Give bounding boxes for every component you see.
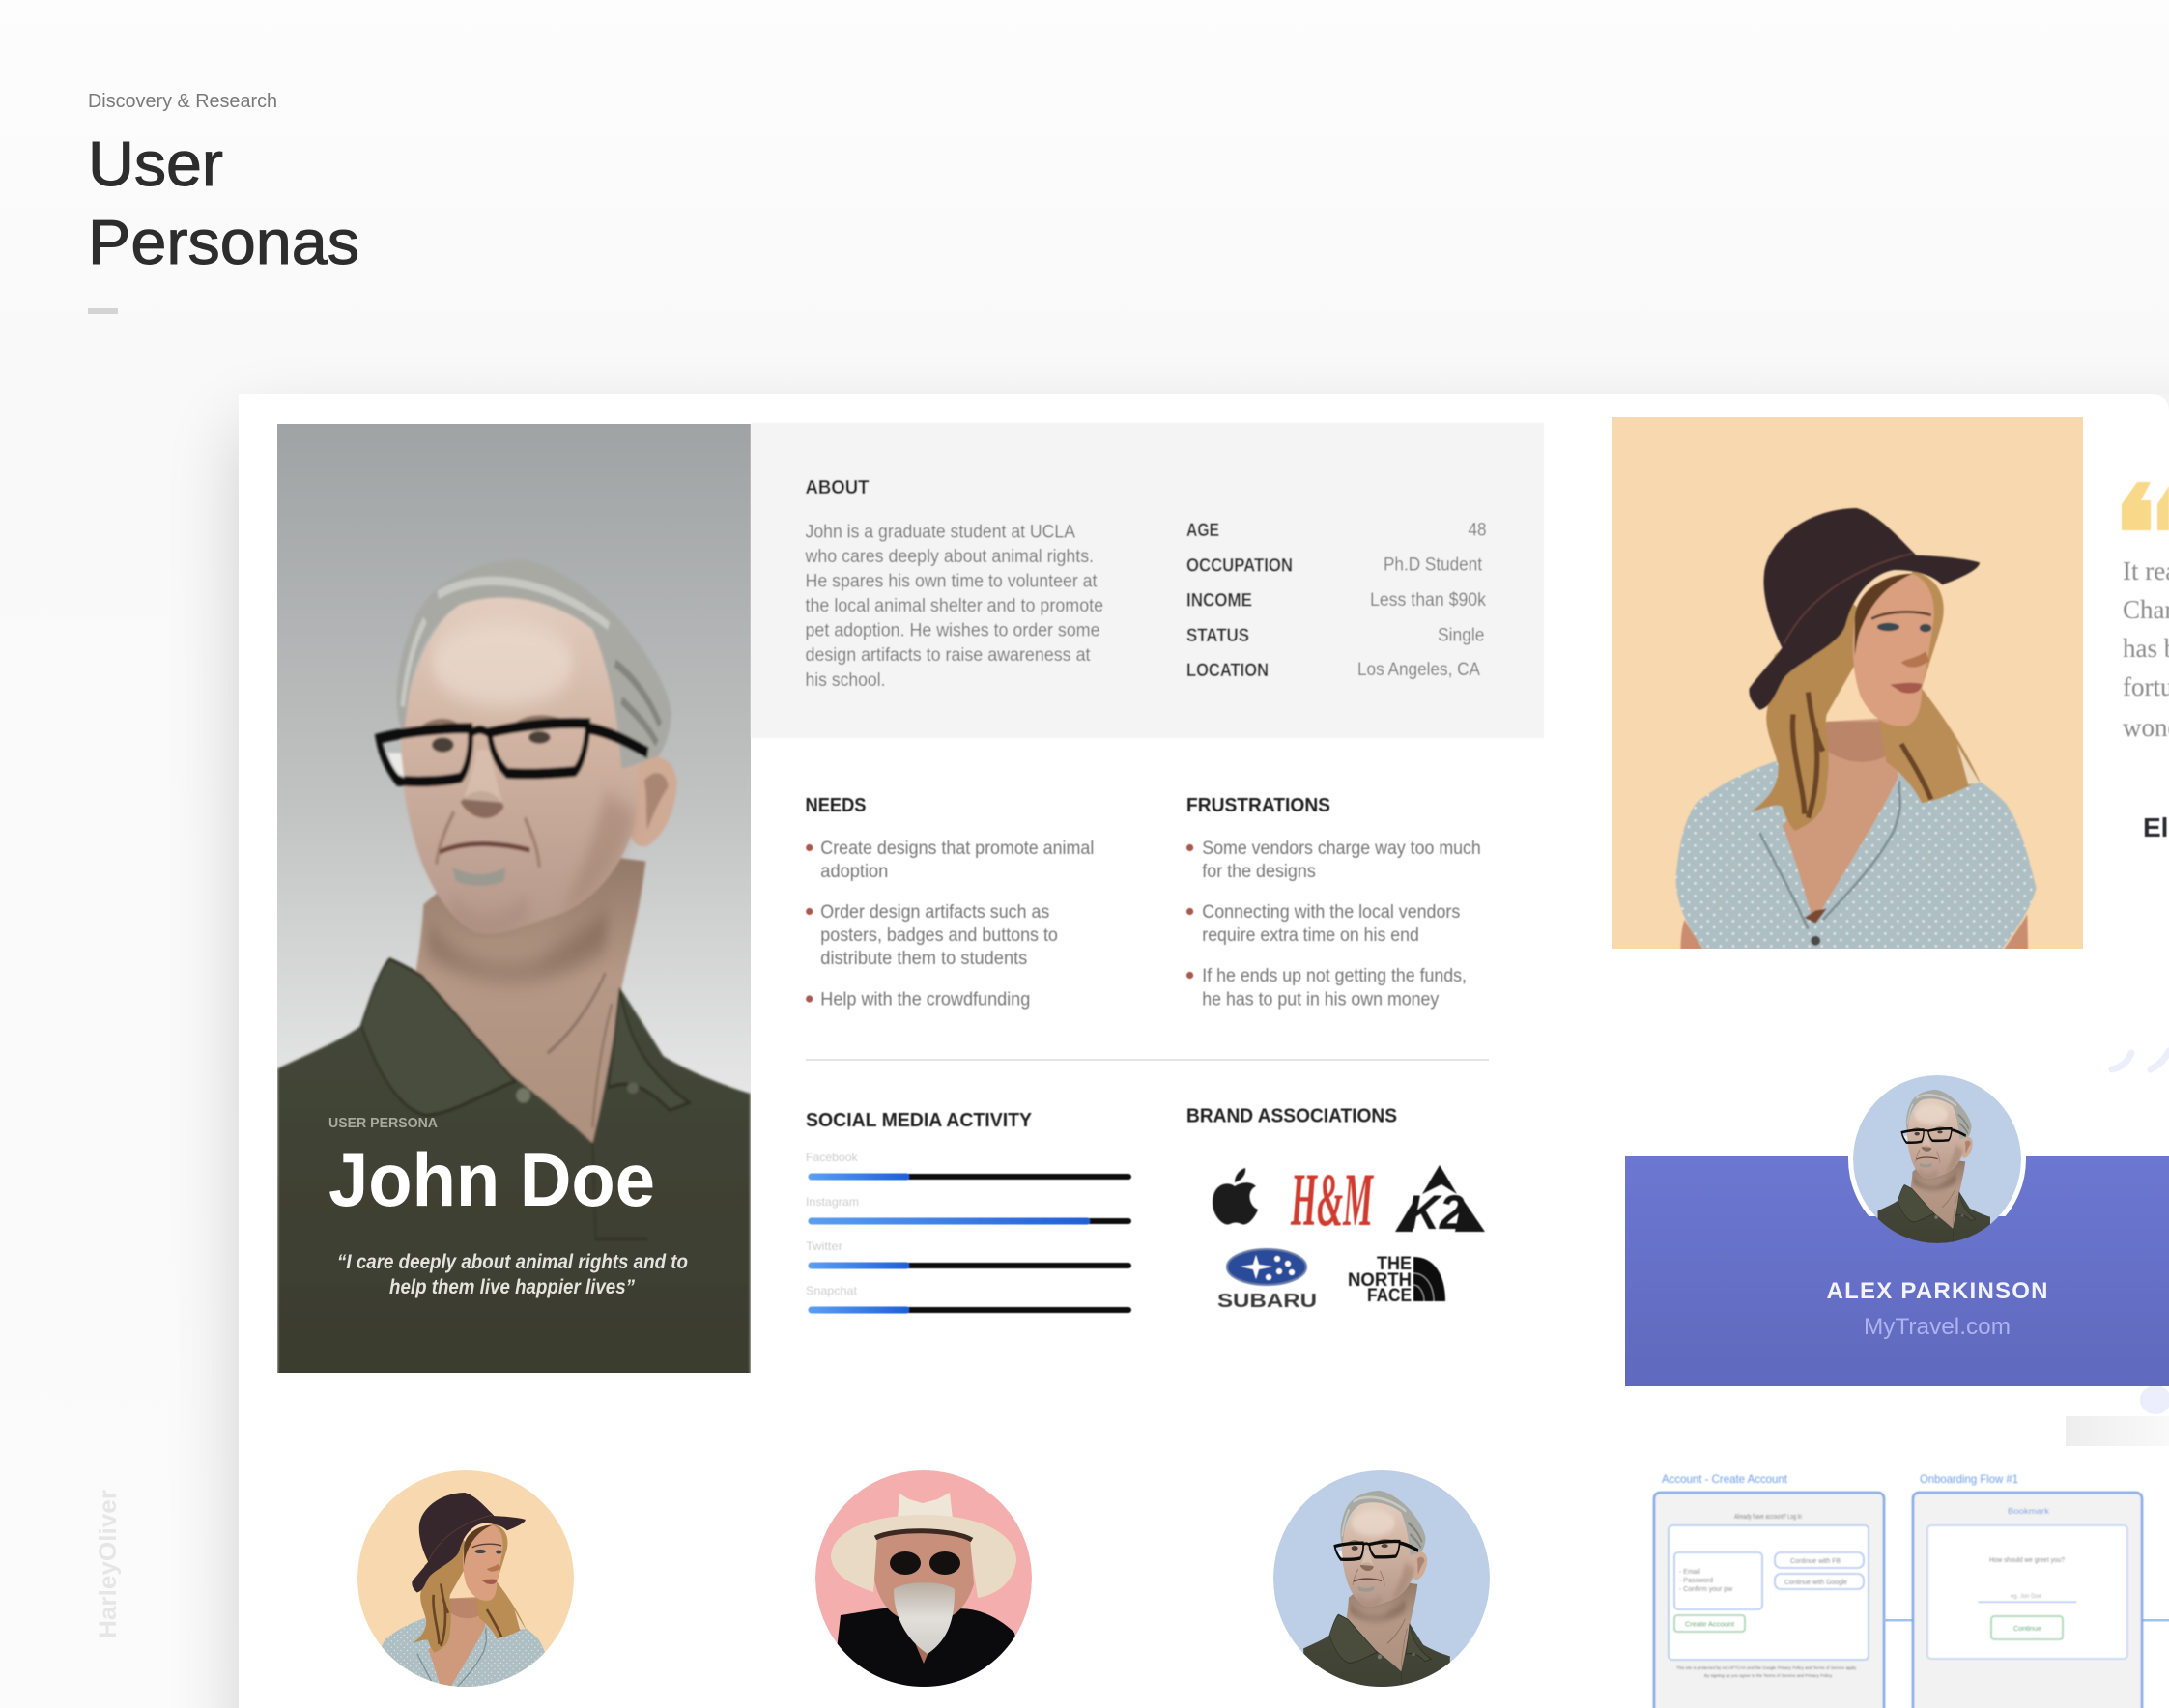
wireframe footnote: By signing up you agree to the Terms of Service and Privacy Policy. bbox=[1704, 1673, 1833, 1678]
wireframe: onboarding flow bbox=[1913, 1472, 2142, 1708]
panel: brand associations bbox=[1186, 1105, 1485, 1312]
panel: about bbox=[751, 423, 1544, 738]
frustrations list: he has to put in his own money bbox=[1202, 990, 1440, 1011]
panel: frustrations bbox=[1186, 795, 1481, 1011]
wireframe form: - Email bbox=[1679, 1569, 1700, 1576]
logo: The North Face bbox=[1348, 1254, 1445, 1306]
frustrations list: for the designs bbox=[1202, 862, 1316, 882]
panel: needs bbox=[806, 795, 1094, 1011]
demographic table: STATUS bbox=[1186, 626, 1249, 646]
persona quote bbox=[337, 1251, 688, 1298]
wireframe: account create account bbox=[1654, 1472, 1884, 1708]
wireframe buttons: Continue with Google bbox=[1784, 1580, 1847, 1586]
wireframe buttons bbox=[1674, 1552, 1864, 1632]
testimonial text bbox=[2123, 556, 2169, 742]
about text: pet adoption. He wishes to order some bbox=[806, 620, 1099, 641]
frustrations list: Some vendors charge way too much bbox=[1202, 839, 1481, 859]
testimonial fragment bbox=[2122, 482, 2169, 842]
logo: The North Face: FACE bbox=[1367, 1286, 1412, 1306]
demographic table: INCOME bbox=[1186, 591, 1252, 611]
about text bbox=[805, 522, 1103, 691]
persona quote: help them live happier lives” bbox=[389, 1276, 635, 1298]
needs list: Order design artifacts such as bbox=[820, 902, 1049, 923]
frustrations list: Connecting with the local vendors bbox=[1202, 902, 1460, 923]
frustrations list: If he ends up not getting the funds, bbox=[1202, 966, 1467, 986]
persona label: USER PERSONA bbox=[328, 1115, 438, 1131]
wireframe footnote bbox=[1676, 1665, 1857, 1678]
wireframe form: - Password bbox=[1679, 1578, 1713, 1584]
bar: Twitter bbox=[806, 1239, 1131, 1269]
title: Personas bbox=[88, 207, 359, 277]
wireframe buttons: Create Account bbox=[1685, 1621, 1734, 1629]
avatar: Alex Parkinson bbox=[1853, 1075, 2021, 1243]
demographic table: LOCATION bbox=[1186, 661, 1269, 681]
heading: about: ABOUT bbox=[806, 477, 870, 498]
wireframe: onboarding flow: eg. Jon Doe bbox=[2011, 1594, 2042, 1600]
persona avatar: older man in hat bbox=[815, 1470, 1032, 1700]
portrait: John Doe bbox=[277, 559, 751, 1376]
demographic table: AGE bbox=[1186, 521, 1219, 541]
wireframe: onboarding flow: How should we greet you? bbox=[1989, 1557, 2065, 1564]
logo: The North Face: THE bbox=[1377, 1254, 1412, 1274]
frustrations list: require extra time on his end bbox=[1202, 925, 1419, 946]
about text: He spares his own time to volunteer at bbox=[806, 572, 1098, 591]
logo: Subaru: SUBARU bbox=[1217, 1291, 1317, 1312]
panel: woman portrait on peach bbox=[1612, 417, 2083, 950]
about text: John is a graduate student at UCLA bbox=[806, 522, 1075, 543]
demographic table: OCCUPATION bbox=[1186, 556, 1293, 576]
wireframe: onboarding flow: Continue bbox=[2013, 1626, 2041, 1633]
about text: his school. bbox=[806, 670, 885, 691]
demographic table: Single bbox=[1438, 626, 1484, 645]
title: User bbox=[88, 128, 223, 199]
title dash bbox=[88, 308, 118, 314]
website: MyTravel.com bbox=[1864, 1314, 2011, 1340]
about text: the local animal shelter and to promote bbox=[806, 596, 1103, 616]
demographic table: Los Angeles, CA bbox=[1357, 660, 1480, 680]
bar: Facebook: Facebook bbox=[806, 1151, 859, 1164]
needs list: Help with the crowdfunding bbox=[820, 990, 1030, 1011]
needs list: distribute them to students bbox=[820, 949, 1027, 969]
testimonial author: El bbox=[2143, 812, 2168, 842]
frustrations list bbox=[1186, 839, 1481, 1011]
decorative lavender marks bbox=[2112, 1051, 2169, 1069]
panel: Alex Parkinson banner bbox=[1625, 1070, 2169, 1386]
bar: Snapchat: Snapchat bbox=[806, 1284, 858, 1297]
wireframe: onboarding flow: Bookmark bbox=[2008, 1507, 2050, 1516]
logo: K2: K2 bbox=[1407, 1185, 1465, 1239]
persona avatar: woman bbox=[357, 1470, 574, 1708]
demographic table bbox=[1186, 520, 1486, 681]
panel: social media activity bbox=[806, 1110, 1131, 1314]
wireframe: account create account: Already have account? Log In bbox=[1734, 1514, 1802, 1521]
heading: needs: NEEDS bbox=[806, 795, 866, 816]
bar: Snapchat bbox=[806, 1284, 1131, 1314]
about text: design artifacts to raise awareness at bbox=[806, 645, 1091, 666]
grey strip bbox=[2066, 1416, 2169, 1446]
title bbox=[88, 128, 359, 277]
demographic table: 48 bbox=[1469, 520, 1486, 541]
wireframe buttons: Continue with FB bbox=[1790, 1558, 1841, 1565]
logo: Subaru bbox=[1217, 1249, 1317, 1312]
avatar ring bbox=[1848, 1156, 2026, 1216]
white presentation card bbox=[239, 394, 2169, 1708]
decorative lavender circle bbox=[2140, 1385, 2169, 1414]
persona quote: “I care deeply about animal rights and to bbox=[337, 1251, 688, 1273]
portrait: woman in hat bbox=[1676, 508, 2037, 950]
persona avatar: man with glasses bbox=[1273, 1470, 1490, 1708]
heading: social media activity: SOCIAL MEDIA ACTIVITY bbox=[806, 1110, 1033, 1131]
needs list: Create designs that promote animal bbox=[820, 839, 1094, 859]
panel: John Doe persona photo bbox=[277, 424, 751, 1376]
panel: brand associations: H&M bbox=[1291, 1157, 1374, 1241]
heading: brand associations: BRAND ASSOCIATIONS bbox=[1186, 1105, 1397, 1126]
demographic table: Less than $90k bbox=[1370, 590, 1486, 611]
wireframe title: Account - Create Account bbox=[1662, 1472, 1788, 1486]
bar: Facebook bbox=[806, 1151, 1131, 1181]
needs list: posters, badges and buttons to bbox=[820, 925, 1058, 946]
logo: The North Face: NORTH bbox=[1348, 1270, 1412, 1291]
persona name: John Doe bbox=[328, 1137, 655, 1222]
demographic table: Ph.D Student bbox=[1384, 555, 1483, 576]
needs list: adoption bbox=[820, 862, 888, 882]
logo: Apple bbox=[1213, 1168, 1258, 1224]
card shadow bbox=[239, 425, 2169, 1708]
wireframe form bbox=[1674, 1552, 1762, 1609]
wireframe connectors bbox=[1884, 1619, 2169, 1621]
heading: frustrations: FRUSTRATIONS bbox=[1186, 795, 1330, 816]
bar: Instagram: Instagram bbox=[806, 1195, 859, 1209]
wireframe footnote: This site is protected by reCAPTCHA and the Google Privacy Policy and Terms of Service apply. bbox=[1676, 1665, 1857, 1670]
logo: K2 bbox=[1395, 1165, 1485, 1239]
wireframe form: - Confirm your pw bbox=[1679, 1586, 1733, 1593]
bar: Twitter: Twitter bbox=[806, 1239, 842, 1253]
name: ALEX PARKINSON bbox=[1826, 1278, 2048, 1304]
about text: who cares deeply about animal rights. bbox=[805, 547, 1094, 567]
watermark: HarleyOliver: HarleyOliver bbox=[95, 1490, 122, 1638]
bar: Instagram bbox=[806, 1195, 1131, 1225]
needs list bbox=[806, 839, 1094, 1011]
wireframe title: Onboarding Flow #1 bbox=[1920, 1472, 2018, 1486]
quote mark bbox=[2122, 482, 2169, 530]
eyebrow: Discovery & Research: Discovery & Research bbox=[88, 91, 277, 112]
